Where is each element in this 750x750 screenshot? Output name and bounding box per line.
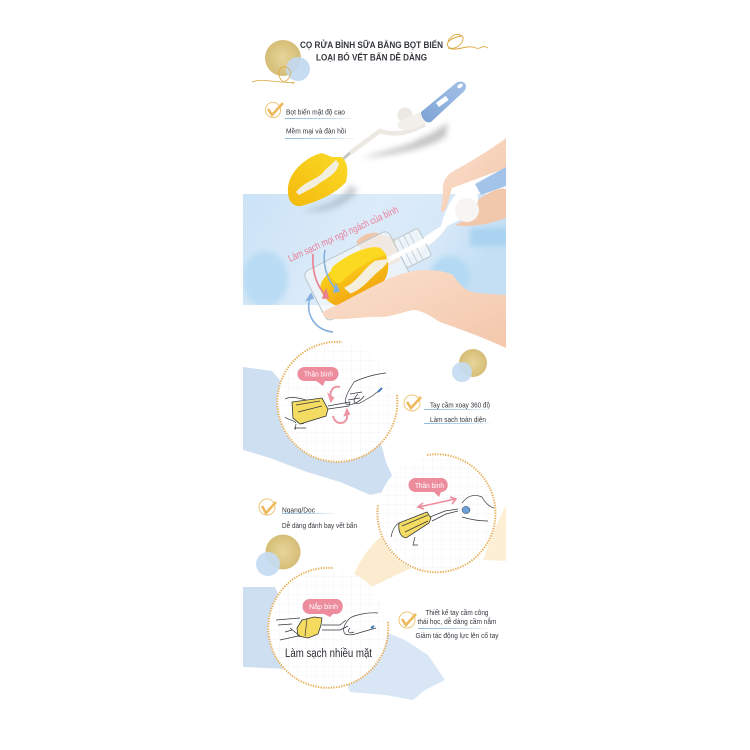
feature list: foam density: Bọt biển mật độ cao xyxy=(286,108,345,116)
sketch: brush and hand xyxy=(276,613,378,640)
feature text: horizontal and vertical xyxy=(259,499,357,530)
feature list: foam density: Mềm mại và đàn hồi xyxy=(286,126,346,136)
feature text: ergonomic handle: thái học, dễ dàng cầm nắm xyxy=(418,617,496,626)
title xyxy=(300,39,443,64)
photo: bottle with sponge brush xyxy=(303,216,439,322)
speech bubble: Thân bình xyxy=(415,481,444,490)
watercolor brush: lower right blue xyxy=(345,632,445,700)
circle panel: horizontal and vertical xyxy=(377,454,495,574)
photo: palm holding bottle xyxy=(323,270,506,348)
feature list: foam density xyxy=(265,102,357,139)
rotated label: Làm sạch mọi ngõ ngách của bình xyxy=(286,204,400,265)
panel: blue background xyxy=(242,194,510,307)
sketch: brush and hand xyxy=(391,495,494,545)
feature text: ergonomic handle xyxy=(399,608,499,640)
sketch: brush and hand xyxy=(285,373,386,430)
icon: check badge xyxy=(399,612,416,628)
product: sponge bottle brush xyxy=(288,82,466,212)
feature text: 360 handle xyxy=(404,395,494,424)
decoration: gold and blue circles 3 xyxy=(256,534,300,576)
arrows: rotation xyxy=(329,387,349,423)
icon: check badge xyxy=(265,102,283,118)
caption: Làm sạch nhiều mặt xyxy=(285,648,373,660)
feature text: 360 handle: Tay cầm xoay 360 độ xyxy=(430,400,490,410)
title decoration: gold and blue circles xyxy=(252,40,310,84)
speech bubble: Nắp bình xyxy=(309,602,338,611)
feature text: ergonomic handle: Thiết kế tay cầm công xyxy=(426,608,488,617)
watercolor brush: yellow left xyxy=(345,527,440,600)
arrow: double headed xyxy=(418,497,456,509)
rotation arrows xyxy=(307,250,339,332)
feature text: 360 handle: Làm sạch toàn diện xyxy=(430,415,486,424)
title: LOẠI BỎ VẾT BẨN DỄ DÀNG xyxy=(316,52,427,64)
title: CỌ RỬA BÌNH SỮA BẰNG BỌT BIỂN xyxy=(300,39,443,51)
circle panel: rotating handle xyxy=(277,342,397,462)
watercolor brush: upper blue xyxy=(243,367,397,495)
feature text: horizontal and vertical: Ngang/Dọc xyxy=(282,506,315,514)
watercolor brush: yellow right xyxy=(483,505,506,561)
icon: check badge xyxy=(259,499,276,515)
feature text: ergonomic handle: Giảm tác động lực lên cổ tay xyxy=(416,631,499,640)
decoration: gold and blue circles 2 xyxy=(452,349,487,382)
feature text: horizontal and vertical: Dễ dàng đánh bay vết bẩn xyxy=(282,521,357,530)
title decoration: gold flourish xyxy=(447,34,488,49)
speech bubble: Thân bình xyxy=(304,370,333,378)
watercolor brush: lower left blue xyxy=(243,587,310,670)
icon: check badge xyxy=(404,395,421,411)
photo: hand holding brush xyxy=(400,138,506,260)
circle panel: multi surface cleaning xyxy=(268,568,388,688)
